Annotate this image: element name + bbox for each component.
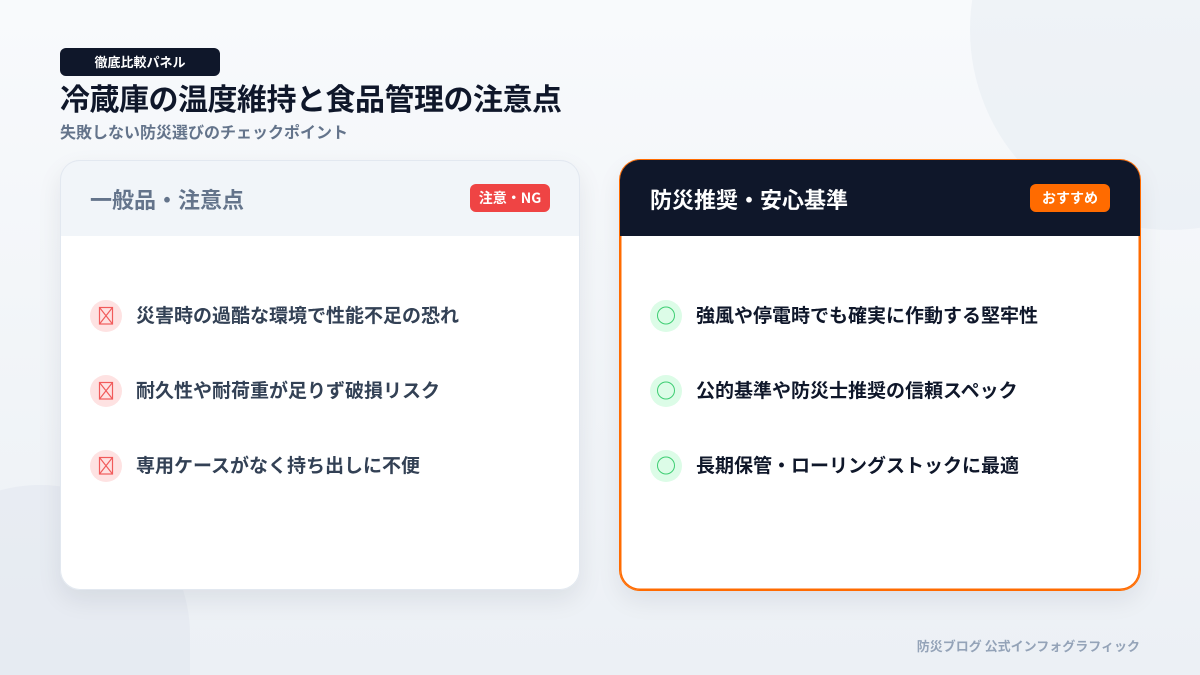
item text: 専用ケースがなく持ち出しに不便 <box>136 451 420 478</box>
list item: portability <box>90 450 420 482</box>
list item: durability <box>90 375 440 407</box>
decorative circle: bottom left <box>0 485 190 675</box>
list item: rolling stock <box>650 450 1019 482</box>
badge: comparison panel <box>60 48 220 76</box>
item text: 公的基準や防災士推奨の信頼スペック <box>696 376 1018 403</box>
tag: recommended <box>1030 184 1110 212</box>
item text: 強風や停電時でも確実に作動する堅牢性 <box>696 301 1038 328</box>
panel header: general products <box>60 160 580 236</box>
item text: 長期保管・ローリングストックに最適 <box>696 451 1019 478</box>
icon: cross <box>90 300 122 332</box>
tag: recommended: おすすめ <box>1042 188 1098 208</box>
icon: circle <box>650 375 682 407</box>
title: 冷蔵庫の温度維持と食品管理の注意点 <box>60 75 562 119</box>
decorative circle: top right <box>970 0 1200 230</box>
panel header: recommended <box>620 160 1140 236</box>
icon: circle <box>650 300 682 332</box>
panel: disaster-prevention recommended <box>620 160 1140 590</box>
list item: disaster performance <box>90 300 459 332</box>
tag: caution NG: 注意・NG <box>479 188 541 208</box>
badge: comparison panel: 徹底比較パネル <box>94 52 186 71</box>
icon: circle <box>650 450 682 482</box>
panel: general products <box>60 160 580 590</box>
list item: trusted spec <box>650 375 1018 407</box>
item text: 耐久性や耐荷重が足りず破損リスク <box>136 376 440 403</box>
heading: recommended: 防災推奨・安心基準 <box>650 183 848 215</box>
tag: caution NG <box>470 184 550 212</box>
list item: robustness <box>650 300 1038 332</box>
item text: 災害時の過酷な環境で性能不足の恐れ <box>136 301 459 328</box>
subtitle: 失敗しない防災選びのチェックポイント <box>60 119 348 143</box>
heading: general products: 一般品・注意点 <box>90 183 244 215</box>
icon: cross <box>90 450 122 482</box>
icon: cross <box>90 375 122 407</box>
footer credit: 防災ブログ 公式インフォグラフィック <box>917 636 1140 655</box>
